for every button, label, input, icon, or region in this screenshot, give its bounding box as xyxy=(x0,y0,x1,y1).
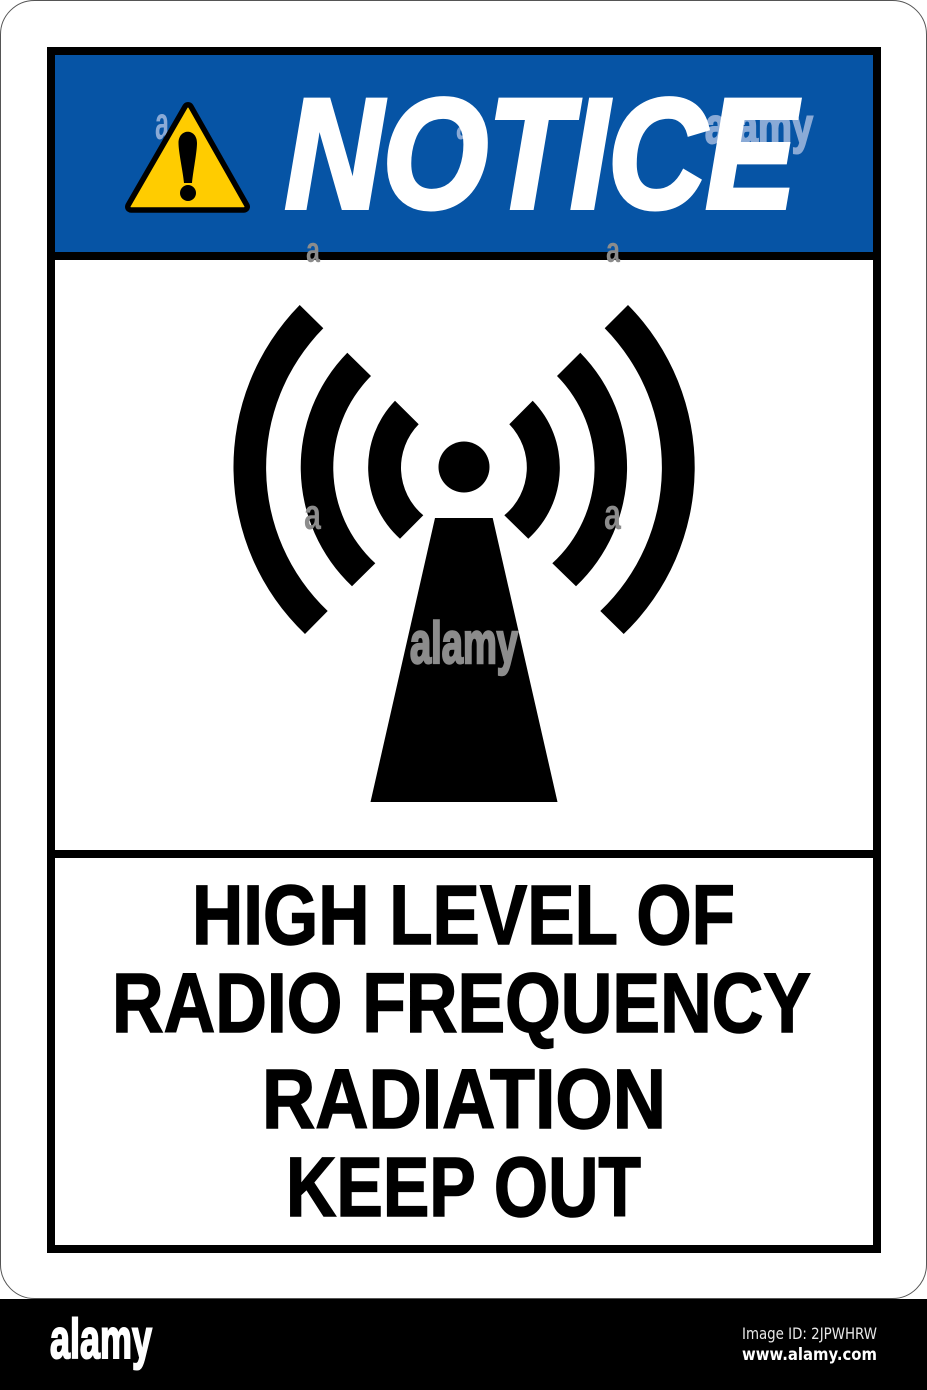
line 1: HIGH LEVEL OF xyxy=(192,868,735,962)
heading: notice: NOTICE xyxy=(285,68,799,242)
website: www.alamy.com xyxy=(742,1345,877,1365)
sign frame xyxy=(51,51,877,1249)
footer bar xyxy=(0,1299,927,1390)
header watermark: a xyxy=(155,97,169,149)
right inner wave xyxy=(504,401,560,539)
header watermark xyxy=(155,97,813,154)
line 3: RADIATION xyxy=(262,1052,666,1146)
watermark: a xyxy=(604,490,621,539)
left inner wave xyxy=(368,401,423,539)
watermark: a xyxy=(306,229,321,270)
icon: warning triangle xyxy=(131,108,244,207)
line 4: KEEP OUT xyxy=(286,1140,641,1234)
header banner xyxy=(55,55,873,260)
left outer wave xyxy=(233,305,328,634)
line 2: RADIO FREQUENCY xyxy=(112,956,811,1050)
right outer wave xyxy=(600,305,695,634)
icon: radio frequency tower xyxy=(233,305,695,802)
watermark: alamy xyxy=(410,611,518,676)
image id: Image ID: 2JPWHRW xyxy=(742,1324,877,1343)
tower body xyxy=(370,518,558,802)
footer logo: alamy xyxy=(50,1307,152,1370)
warning message xyxy=(112,868,811,1234)
header watermark: a xyxy=(456,104,470,148)
header watermark: alamy xyxy=(705,98,813,154)
watermark: a xyxy=(304,490,321,539)
watermark xyxy=(304,229,621,676)
antenna dot xyxy=(438,442,490,492)
left middle wave xyxy=(301,353,375,586)
divider xyxy=(55,850,873,858)
right middle wave xyxy=(552,353,627,586)
watermark: a xyxy=(606,229,621,270)
